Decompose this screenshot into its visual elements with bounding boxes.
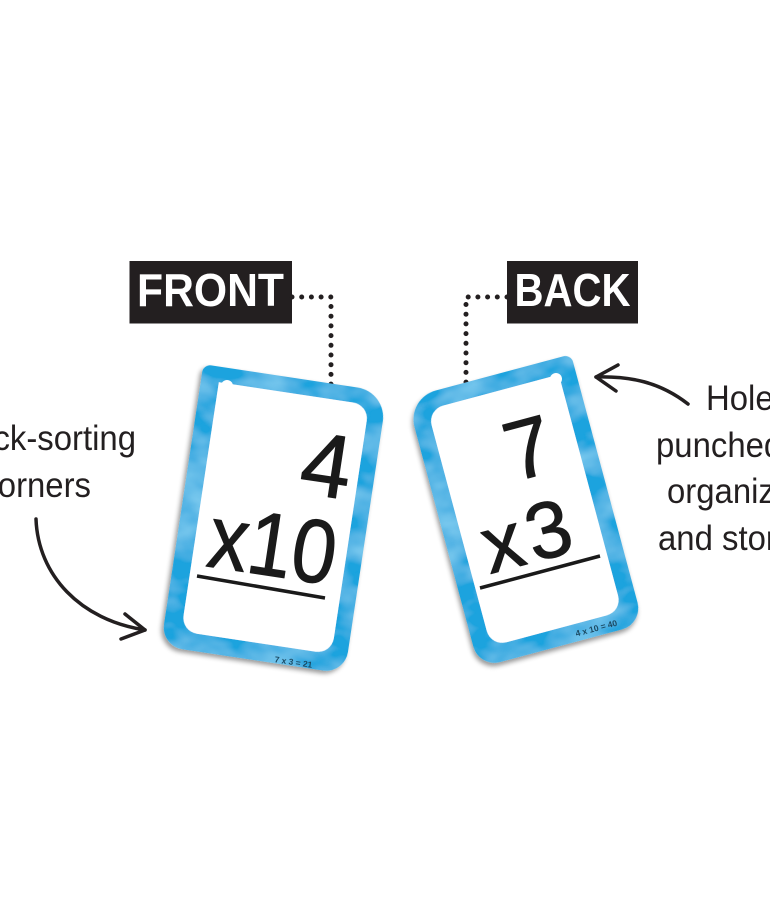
- card frame: [407, 354, 643, 668]
- arrow: to card corner: [36, 519, 145, 639]
- answer rule: [197, 576, 325, 598]
- number x10: x10: [202, 487, 344, 605]
- number x3: x3: [471, 481, 581, 590]
- label: BACK: BACK: [514, 264, 630, 316]
- dotted connector: FRONT to card: [292, 297, 331, 388]
- callout: sorting corners: [0, 419, 136, 505]
- callout: punched hole: [656, 379, 770, 558]
- dotted connector: BACK to card: [466, 297, 507, 388]
- answer rule: [480, 556, 600, 588]
- punched hole: [221, 380, 233, 392]
- number 4: 4: [294, 413, 359, 520]
- answer key: 7 x 3 = 21: [274, 654, 313, 670]
- answer key: 4 x 10 = 40: [574, 618, 618, 638]
- card frame: [161, 364, 387, 674]
- front card: [161, 364, 387, 674]
- punched hole: [550, 373, 562, 385]
- back card: [407, 354, 643, 668]
- arrow: to punched hole: [596, 365, 688, 404]
- label: FRONT: FRONT: [137, 264, 284, 316]
- number 7: 7: [494, 397, 563, 499]
